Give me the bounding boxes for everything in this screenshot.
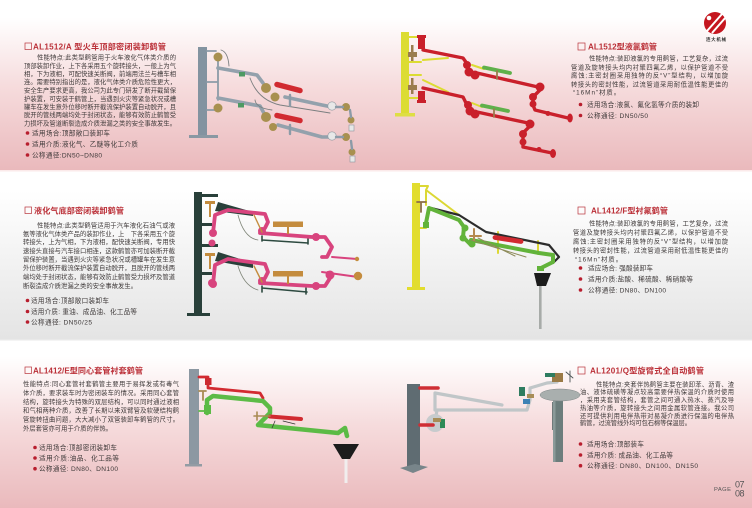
text block: AL1201/Q description: ，采用夹套管结构，套管之间可通入热水、蒸汽及导	[580, 395, 734, 404]
text block: LPG description: 氨等液化气体类产品的装卸作业，上 下各采用五个旋	[23, 229, 176, 238]
text block: AL1412/F description: “16Mn”材质。	[575, 254, 622, 264]
text block: LPG description: 留保护装置，当遇到火灾等紧急状况或槽罐车在发生意	[23, 254, 175, 264]
heading: LPG bottom arm: 液化气底部密闭装卸鹤管	[34, 206, 124, 216]
text block: AL1512/A description: 安全生产要求更高，我公司为此专门研发了断开截留保	[24, 86, 177, 94]
text block: AL1412/E description: 体介质，要求装车时为密闭装车的情况。采用同心套管	[23, 388, 179, 397]
text block: AL1201/Q description: 鹤管，过流管线外均可包石棉等保温层。	[580, 418, 691, 427]
text block: AL1201/Q description: 油、液体硫磺等凝点较高需要伴热保温的介质时使用	[580, 387, 734, 396]
panel: AL1512/A rail top loading arm	[0, 0, 752, 170]
text block: LPG description: 端均处于封闭状态，能够有效防止鹤管受力损坏及管道	[23, 272, 176, 281]
page number: 07	[735, 480, 744, 490]
page number: 08	[735, 488, 744, 498]
text block: AL1201/Q description	[580, 380, 735, 427]
text block: AL1412/F description: 腐蚀;主密封圈采用独特的反“V”型结构，以增加旋	[573, 236, 729, 246]
list: AL1512 specifications: 适用场合:液氯、氟化氢等介质的装卸	[587, 100, 699, 109]
list: AL1201/Q specifications: 适用介质: 成品油、化工品等	[587, 450, 673, 460]
diagram: red and yellow liquid chlorine arm	[395, 32, 573, 158]
text block: AL1512 description: 性能特点:装卸液氯的专用鹤管，工艺复杂，过流	[589, 54, 729, 62]
heading: AL1412/F: AL1412/F型衬氟鹤管	[591, 206, 668, 216]
diagram: grey double loading arm	[189, 47, 356, 162]
text block: AL1512/A description: 罐车在发生意外位移时断开截流保护装置自动脱开，且	[24, 102, 176, 111]
diagram: green and red coaxial arm with funnel	[185, 369, 359, 483]
diagram: green fluorine-lined arm with cone	[407, 183, 559, 329]
icon: black funnel	[333, 444, 359, 459]
heading: AL1512: AL1512型液氯鹤管	[588, 42, 657, 52]
text block: AL1201/Q description: 性能特点:夹套伴热鹤管主要在装卸苯、沥青、渣	[596, 380, 735, 388]
text block: LPG description: 性能特点:此类型鹤管适用于汽车液化石油气或液	[37, 220, 176, 230]
text block: AL1412/E description: 管旋转扭曲问题，大大减小了双管装卸车鹤管的尺寸。	[23, 414, 179, 424]
text block: AL1412/E description: 和气相两种介质，改善了长期以来双臂管及软硬结构鹤	[23, 406, 179, 414]
text block: AL1412/E description	[23, 379, 180, 432]
text block: LPG description: 速接头直接与汽车接口相连，这款鹤管亦可加装断开截	[23, 246, 176, 255]
text block: AL1412/F description	[573, 218, 729, 264]
text block: LPG description: 转接头，上为气相，下为液相，配快速关断阀，专用快	[23, 237, 176, 246]
text block: AL1201/Q description: 热油等介质，旋转接头之间用金属软管连接。我公司	[580, 403, 734, 412]
text block: LPG description: 断裂造成介质泄漏之类的安全事故发生。	[23, 281, 137, 290]
logo: 连大机械	[706, 36, 726, 43]
text block: AL1412/F description: 管道及旋转接头均内衬聚四氟乙烯，以保护管道不受	[573, 228, 728, 236]
list: AL1512/A specifications: 适用场合:顶部敞口装卸车	[32, 128, 110, 138]
list: AL1201/Q specifications: 公称通径: DN80、DN100、DN150	[587, 461, 698, 470]
page number	[714, 480, 744, 498]
list: LPG specifications: 适用场合:顶部敞口装卸车	[31, 296, 109, 305]
list: AL1512/A specifications: 适用介质:液化气、乙醚等化工介质	[32, 140, 138, 148]
text block: AL1512 description: 腐蚀;主密封圈采用独特的反“V”型结构，以增加旋	[571, 70, 729, 80]
text block: AL1201/Q description: 还可提供利用电伴热带对易凝介质进行保温的电伴热	[580, 411, 735, 420]
list: AL1412/E specifications: 公称通径: DN80、DN100	[39, 464, 118, 473]
text block: AL1512 description: 管道及旋转接头均内衬聚四氟乙烯，以保护管道不受	[571, 62, 728, 72]
text block: AL1512/A description: 顶部装卸作业，上下各采用五个旋转接头，一般上为气	[24, 61, 177, 70]
heading: AL1412/E: AL1412/E型同心套管衬套鹤管	[33, 366, 143, 376]
list: AL1512 specifications	[579, 100, 699, 120]
text block: LPG description: 外位移时断开截流保护装置自动脱开，且脱开的管线两	[23, 263, 175, 272]
panel: LPG bottom loading arm	[0, 170, 752, 339]
text block: AL1512/A description: 力损坏及管道断裂造成介质泄漏之类的安全事故发生。	[24, 118, 176, 128]
text block: LPG description	[23, 220, 176, 290]
text block: AL1512/A description	[24, 52, 177, 128]
list: AL1412/F specifications	[579, 264, 693, 294]
text block: AL1512/A description: 相，下为液相，可配快速关断阀，前端用法兰与槽车相	[24, 69, 176, 78]
text block: AL1512 description	[571, 54, 729, 96]
text block: AL1512/A description: 脱开的管线两端均处于封闭状态，能够有效防止鹤管受	[24, 110, 176, 119]
text block: AL1512/A description: 连。需要特别指出的是，液化气体类介质危险性更大，	[24, 77, 176, 86]
text block: AL1512/A description: 护装置，可安装于鹤管上，当遇到火灾等紧急状况或槽	[24, 94, 177, 103]
icon: black cone	[534, 273, 551, 286]
logo	[704, 12, 726, 43]
heading: AL1512/A: AL1512/A 型火车顶部密闭装卸鹤管	[33, 42, 166, 52]
text block: AL1412/F description: 性能特点:装卸液氯的专用鹤管，工艺复杂，过流	[589, 218, 729, 228]
page number: PAGE	[714, 487, 731, 493]
list: AL1412/E specifications	[33, 443, 119, 473]
list: AL1512 specifications: 公称通径: DN50/50	[587, 111, 648, 120]
list: AL1412/E specifications: 适用介质:油品、化工品等	[39, 454, 119, 462]
diagram: pink and dark green double arm	[187, 192, 362, 316]
text block: AL1412/E description: 性能特点:同心套管衬套鹤管主要用于易挥发或有毒气	[23, 379, 180, 388]
text block: AL1412/F description: 转接头的密封性能，过流管道采用耐低温性能更佳的	[573, 246, 728, 254]
list: LPG specifications: 公称通径: DN50/25	[31, 318, 92, 326]
list: LPG specifications	[26, 296, 137, 326]
list: LPG specifications: 适用介质: 重油、成品油、化工品等	[31, 307, 137, 316]
text block: AL1512 description: 转接头的密封性能，过流管道采用耐低温性能更佳的	[571, 80, 728, 88]
text block: AL1412/E description: 外层套管亦可用于介质的伴热。	[23, 424, 112, 432]
list: AL1412/F specifications: 公称通径: DN80、DN100	[588, 286, 666, 294]
panel: AL1412/E coaxial arm	[0, 339, 752, 508]
list: AL1512/A specifications: 公称通径:DN50~DN80	[32, 150, 102, 160]
text block: AL1512 description: “16Mn”材质。	[573, 88, 620, 96]
list: AL1412/E specifications: 适用场合:顶部密闭装卸车	[39, 443, 117, 452]
list: AL1201/Q specifications: 适用场合:顶部装车	[587, 440, 644, 448]
text block: AL1412/E description: 结构，旋转接头为特殊的双层结构，可以同时通过液相	[23, 397, 179, 406]
list: AL1201/Q specifications	[579, 440, 698, 470]
heading: AL1201/Q: AL1201/Q型旋臂式全自动鹤管	[590, 366, 704, 376]
list: AL1412/F specifications: 适用介质:盐酸、稀硫酸、稀硝酸等	[588, 274, 693, 284]
text block: AL1512/A description: 性能特点:此类型鹤管用于火车液化气体类介质的	[37, 52, 176, 62]
list: AL1512/A specifications	[26, 128, 138, 160]
diagram: grey swivel arm with flange	[400, 371, 580, 473]
list: AL1412/F specifications: 适应场合: 强酸装卸车	[588, 264, 653, 272]
